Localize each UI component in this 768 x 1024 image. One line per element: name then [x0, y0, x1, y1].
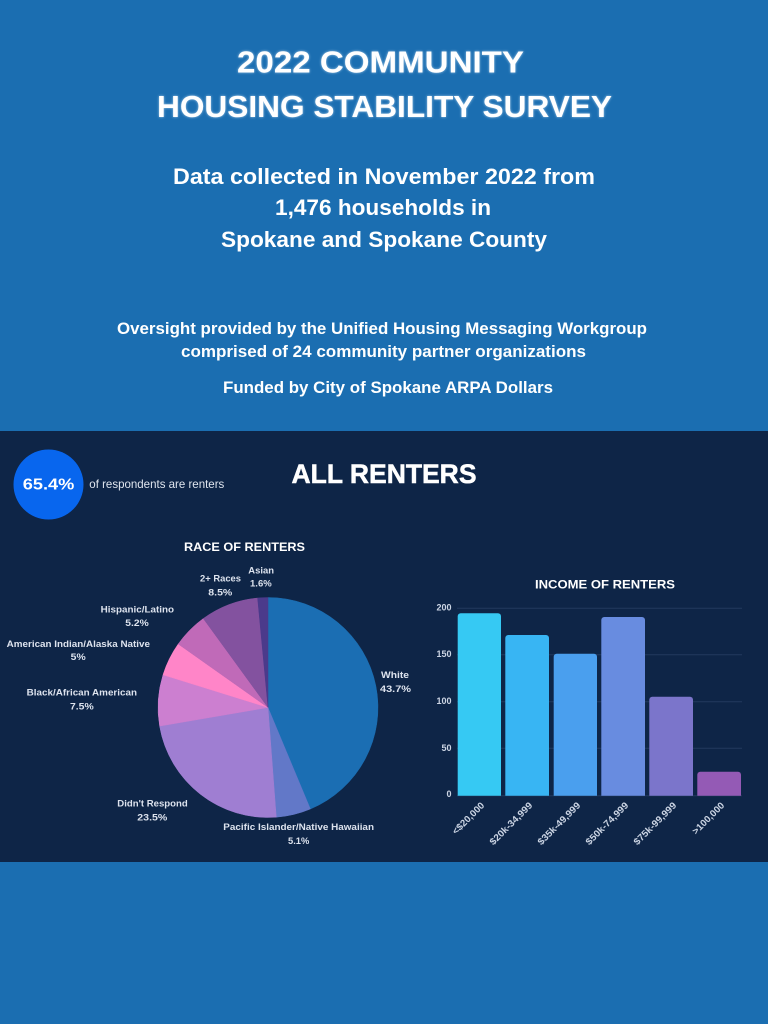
pie labels: 5.2%	[125, 618, 149, 629]
x axis labels: $35k-49,999	[536, 800, 583, 848]
x axis labels: $50k-74,999	[584, 800, 631, 848]
stat: 65.4% of respondents are renters	[14, 450, 224, 520]
gridlines	[457, 608, 742, 796]
subtitle: data collection	[173, 164, 595, 252]
chart title: income of renters: INCOME OF RENTERS	[535, 577, 675, 591]
stat: 65.4% of respondents are renters: of respondents are renters	[89, 477, 224, 491]
subtitle: data collection: 1,476 households in	[275, 195, 491, 220]
x axis labels: >100,000	[690, 800, 727, 837]
pie labels: 5.1%	[288, 836, 310, 847]
y axis labels: 200	[436, 603, 452, 613]
text block: oversight and funding	[117, 319, 647, 397]
pie labels: 8.5%	[208, 588, 233, 599]
x axis labels: $75k-99,999	[632, 800, 679, 848]
pie labels: Didn't Respond	[117, 799, 188, 810]
pie labels	[7, 565, 412, 847]
pie labels: 5%	[71, 652, 86, 663]
chart title: race of renters: RACE OF RENTERS	[184, 540, 305, 554]
pie labels: White	[381, 670, 409, 681]
text block: oversight and funding: comprised of 24 community partner organizations	[181, 342, 586, 361]
pie chart: race of renters	[7, 540, 412, 847]
x axis labels: $20k-34,999	[488, 800, 535, 848]
x axis labels	[450, 800, 727, 848]
pie labels: 2+ Races	[200, 574, 241, 585]
title: 2022 COMMUNITY	[237, 44, 524, 80]
text block: oversight and funding: Oversight provided by the Unified Housing Messaging Workgroup	[117, 319, 647, 338]
panel: all renters	[0, 431, 768, 862]
subtitle: data collection: Data collected in November 2022 from	[173, 164, 595, 189]
y axis labels	[436, 603, 452, 799]
text block: oversight and funding: Funded by City of Spokane ARPA Dollars	[223, 378, 553, 397]
y axis labels: 100	[436, 696, 452, 706]
pie labels: 1.6%	[250, 579, 272, 590]
pie labels: Hispanic/Latino	[101, 605, 174, 616]
y axis labels: 150	[436, 649, 452, 659]
stat: 65.4% of respondents are renters: 65.4%	[23, 476, 75, 493]
pie labels: American Indian/Alaska Native	[7, 639, 150, 650]
pie labels: 43.7%	[380, 684, 412, 695]
bars	[458, 613, 741, 796]
pie labels: Pacific Islander/Native Hawaiian	[223, 822, 374, 833]
bar chart: income of renters	[436, 577, 742, 848]
pie labels: 7.5%	[70, 701, 94, 712]
heading: all renters: ALL RENTERS	[292, 459, 476, 489]
pie slices	[158, 598, 378, 818]
y axis labels: 50	[441, 743, 452, 753]
title: HOUSING STABILITY SURVEY	[157, 89, 612, 124]
x axis labels: <$20,000	[450, 800, 487, 837]
pie labels: 23.5%	[137, 813, 168, 824]
pie labels: Black/African American	[27, 688, 137, 699]
subtitle: data collection: Spokane and Spokane County	[221, 227, 547, 252]
pie labels: Asian	[248, 565, 274, 576]
title	[157, 44, 612, 124]
y axis labels: 0	[446, 789, 452, 799]
